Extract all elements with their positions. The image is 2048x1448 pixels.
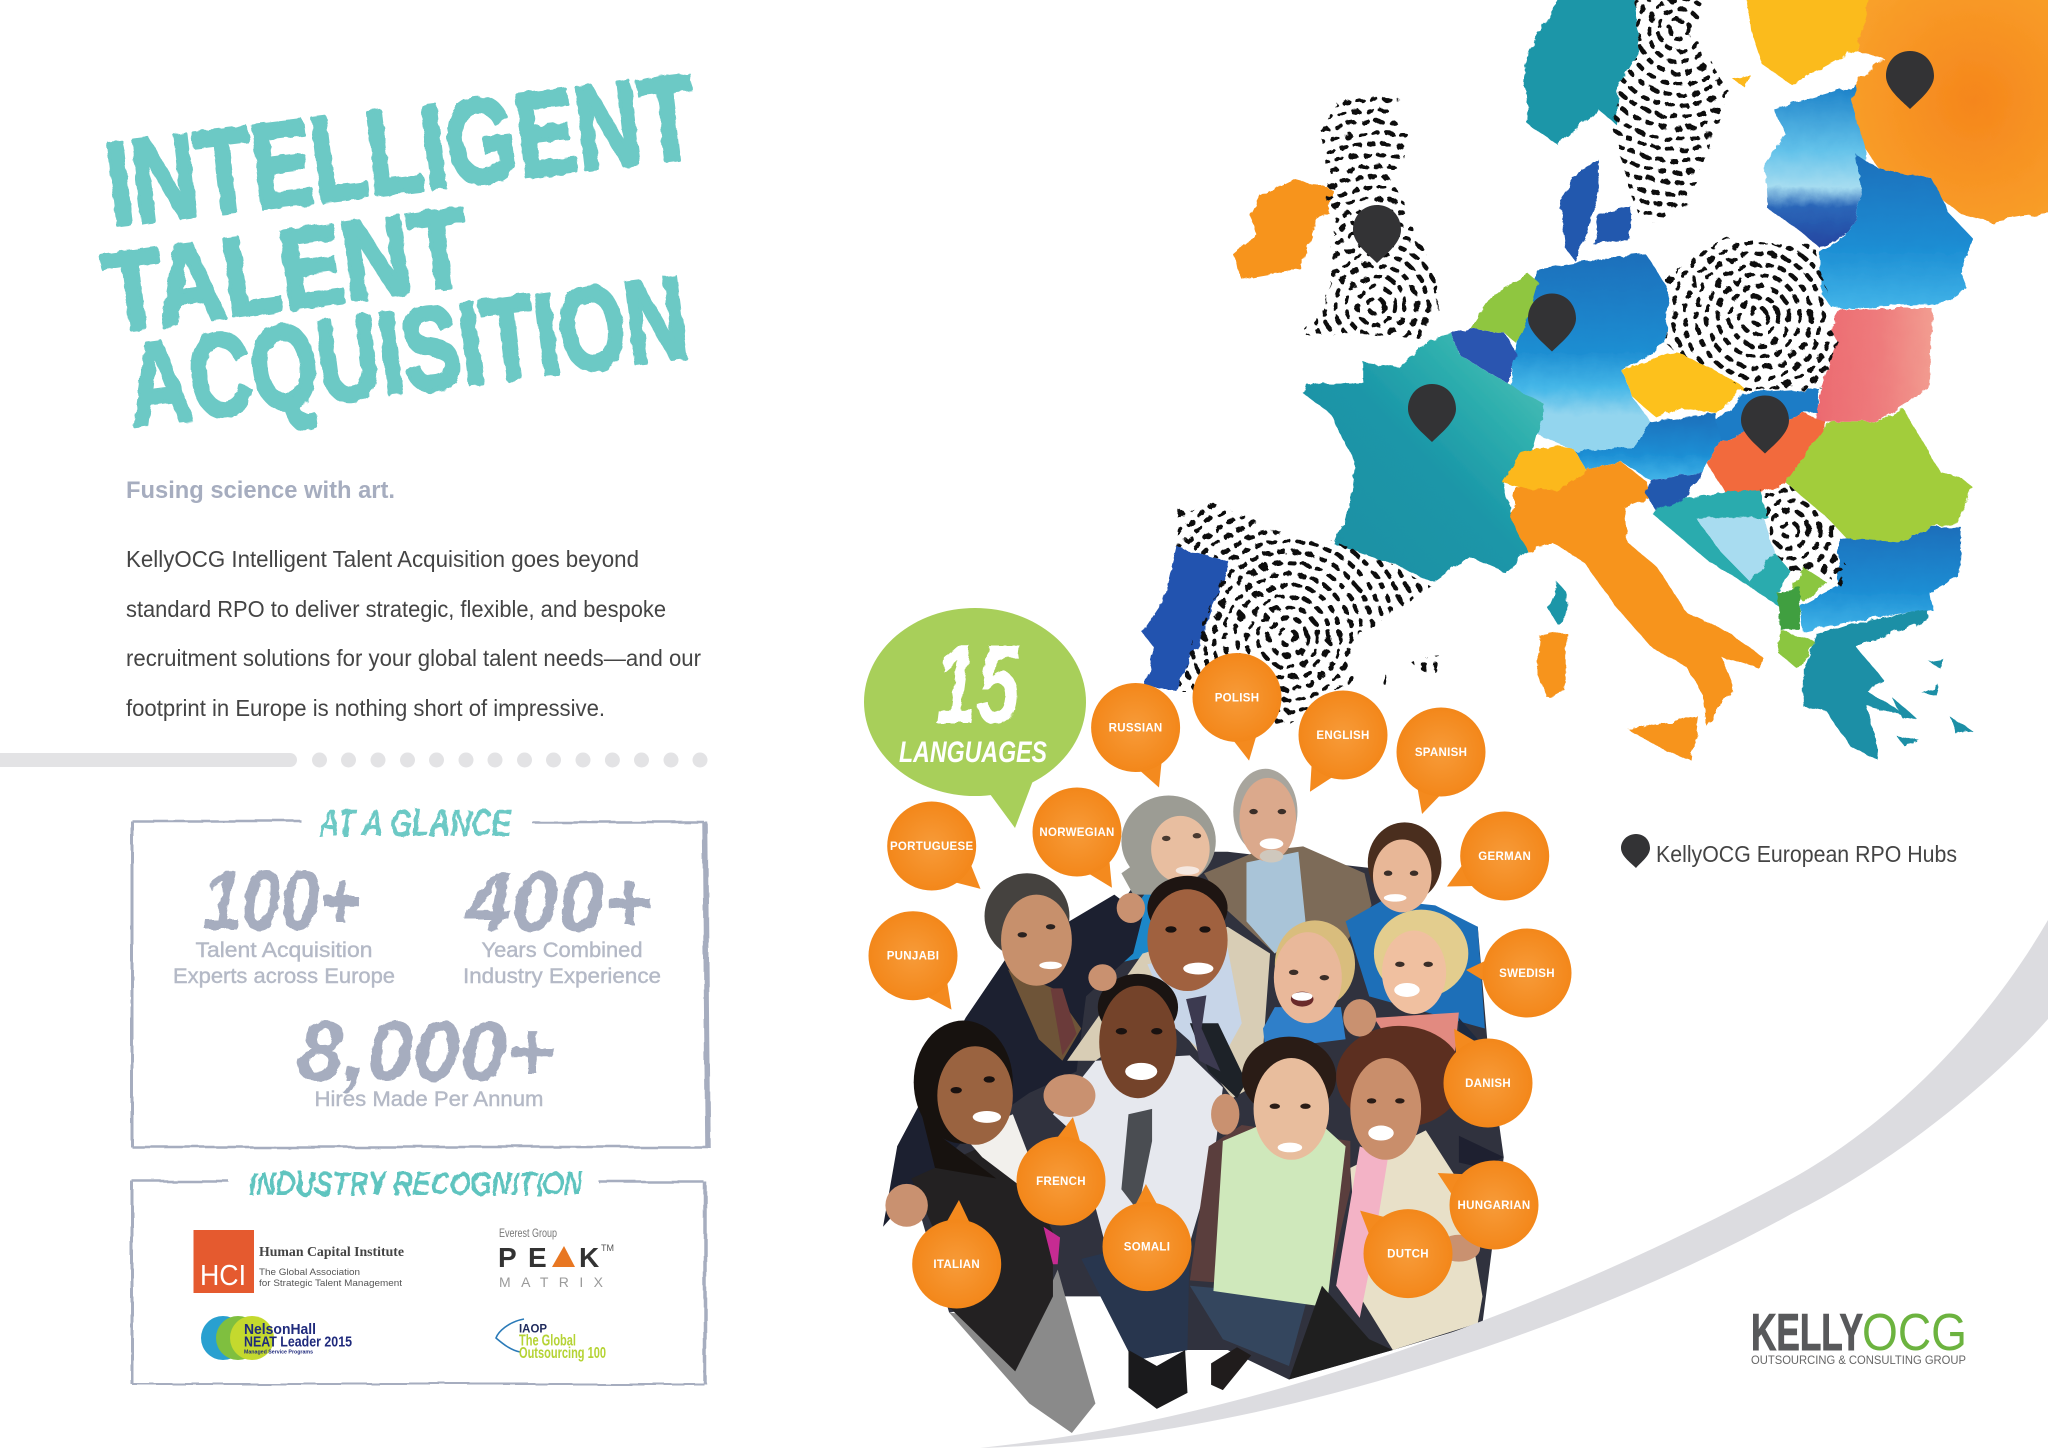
intro paragraph: footprint in Europe is nothing short of impressive.: [126, 695, 605, 721]
person: woman in green blouse: [1190, 1037, 1350, 1390]
bubble: Portuguese: PORTUGUESE: [890, 841, 973, 853]
bubble: Punjabi: PUNJABI: [887, 951, 939, 963]
title: [97, 50, 703, 453]
panel: at a glance: [132, 803, 708, 1148]
logo: Human Capital Institute: for Strategic Talent Management: [259, 1278, 402, 1289]
patterned country: Sweden: [1612, 0, 1729, 223]
hub pins: [1353, 51, 1934, 454]
logo: IAOP Global Outsourcing 100: [496, 1319, 606, 1362]
hands on shoulders: [885, 893, 1480, 1262]
bubble: Hungarian: HUNGARIAN: [1458, 1200, 1530, 1212]
bubble: Somali: SOMALI: [1124, 1242, 1170, 1254]
logo: KellyOCG: KELLY: [1751, 1304, 1863, 1362]
stat: 8,000+ hires: Hires Made Per Annum: [314, 1088, 544, 1111]
person: man with tie, front: [1053, 974, 1223, 1409]
logo: Everest Group PEAK Matrix: Everest Group: [499, 1226, 557, 1240]
patterned country: Spain: [1176, 502, 1439, 724]
patterned country: Poland: [1664, 236, 1840, 392]
bubble: Italian: ITALIAN: [933, 1259, 980, 1271]
patterned country: Serbia: [1760, 486, 1846, 586]
logo: NelsonHall NEAT Leader: Managed Service Programs: [244, 1350, 313, 1356]
title: INTELLIGENT: [99, 50, 703, 252]
logo: Human Capital Institute: [194, 1230, 404, 1293]
logo: Everest Group PEAK Matrix: E: [528, 1242, 547, 1273]
logo: KellyOCG: OCG: [1862, 1304, 1967, 1362]
bubble: Russian: [1091, 683, 1190, 799]
bubble: German: GERMAN: [1478, 851, 1531, 863]
logo: Everest Group PEAK Matrix: TM: [601, 1243, 614, 1253]
bubble: French: FRENCH: [1036, 1176, 1086, 1188]
person: man in beige jacket: [1067, 876, 1270, 1098]
logo: NelsonHall NEAT Leader: [201, 1316, 352, 1360]
bubble: Russian: RUSSIAN: [1109, 722, 1163, 734]
stat: 400+ years: 400+: [464, 855, 652, 949]
logo: NelsonHall NEAT Leader: NEAT Leader 2015: [244, 1334, 352, 1350]
bubble: French: [1016, 1111, 1106, 1226]
bubble: Punjabi: [868, 911, 978, 1029]
person: blonde woman right: [1374, 910, 1478, 1061]
person: curly-haired woman: [1289, 1026, 1504, 1379]
logo: Everest Group PEAK Matrix: [498, 1226, 614, 1290]
bubble: Spanish: SPANISH: [1415, 747, 1467, 759]
intro paragraph: KellyOCG Intelligent Talent Acquisition goes beyond: [126, 546, 639, 572]
person: older man at back: [1204, 769, 1372, 954]
bubble: Italian: [912, 1199, 1001, 1308]
logo: Everest Group PEAK Matrix: MATRIX: [499, 1274, 604, 1290]
bubble: Danish: [1426, 1011, 1532, 1128]
person: man in dark jacket: [883, 873, 1143, 1227]
logo: IAOP Global Outsourcing 100: The Global: [519, 1332, 576, 1350]
callout: 15 languages: LANGUAGES: [899, 736, 1047, 769]
intro paragraph: [126, 546, 701, 721]
stat: 400+ years: [463, 855, 661, 988]
stat: 100+ experts: Talent Acquisition: [196, 939, 372, 962]
bubble: English: ENGLISH: [1316, 730, 1370, 742]
logo: Human Capital Institute: HCI: [200, 1260, 246, 1292]
logo: Human Capital Institute: The Global Association: [259, 1267, 360, 1278]
heading: at a glance: AT A GLANCE: [318, 803, 512, 845]
stat: 400+ years: Years Combined: [482, 939, 642, 962]
bubble: Polish: [1192, 653, 1282, 767]
logo: Everest Group PEAK Matrix: P: [498, 1242, 517, 1273]
stat: 100+ experts: 100+: [203, 853, 360, 947]
bubble: Hungarian: [1421, 1144, 1538, 1250]
stat: 8,000+ hires: 8,000+: [297, 1004, 555, 1098]
bubble: Spanish: [1390, 708, 1486, 824]
person: older woman at back: [1112, 796, 1216, 964]
dotted divider: [0, 752, 708, 768]
subheading: Fusing science with art.: [126, 477, 395, 504]
group silhouette base: [897, 852, 1504, 1379]
group photo of people: [883, 769, 1504, 1433]
bubble: Norwegian: NORWEGIAN: [1039, 827, 1115, 839]
person: young man at back right: [1346, 822, 1485, 1029]
bubble: English: [1281, 690, 1388, 808]
intro paragraph: recruitment solutions for your global talent needs—and our: [126, 645, 701, 671]
bubble: Portuguese: [887, 802, 1002, 914]
stat: 100+ experts: [173, 853, 395, 988]
patterned country: United Kingdom: [1304, 96, 1440, 339]
bubble: Swedish: [1464, 928, 1572, 1018]
callout: 15 languages: 15: [935, 622, 1020, 747]
watercolour and patterned countries: [1115, 0, 2048, 810]
panel: industry recognition: [132, 1165, 705, 1384]
logo: IAOP Global Outsourcing 100: IAOP: [519, 1322, 547, 1336]
intro paragraph: standard RPO to deliver strategic, flexible, and bespoke: [126, 596, 666, 622]
logo: Human Capital Institute: Human Capital Institute: [259, 1244, 404, 1259]
title: ACQUISITION: [120, 251, 695, 453]
bubble: Dutch: DUTCH: [1387, 1249, 1429, 1261]
bubble: Danish: DANISH: [1465, 1078, 1511, 1090]
bubble: Norwegian: [1032, 788, 1140, 905]
heading: industry recognition: INDUSTRY RECOGNITION: [249, 1165, 584, 1202]
legend: European RPO hubs: [1621, 834, 1957, 868]
logo: IAOP Global Outsourcing 100: Outsourcing 100: [519, 1345, 606, 1362]
logo: NelsonHall NEAT Leader: NelsonHall: [244, 1322, 316, 1338]
bubble: Somali: [1102, 1183, 1192, 1291]
person: blonde woman centre: [1263, 920, 1355, 1050]
logo: Everest Group PEAK Matrix: K: [579, 1242, 599, 1273]
bubble: Swedish: SWEDISH: [1499, 968, 1555, 980]
logo: KellyOCG: OUTSOURCING & CONSULTING GROUP: [1751, 1355, 1966, 1367]
bubble: Dutch: [1338, 1186, 1452, 1298]
bubble: Polish: POLISH: [1215, 692, 1259, 704]
grey swoosh: [980, 920, 2048, 1448]
person: woman on left: [911, 1021, 1095, 1433]
bubble: German: [1432, 812, 1549, 916]
title: TALENT: [97, 183, 476, 357]
callout: 15 languages: [864, 608, 1086, 828]
stat: 100+ experts: Experts across Europe: [173, 965, 395, 988]
map of Europe: [1115, 0, 2048, 810]
legend: European RPO hubs: KellyOCG European RPO Hubs: [1656, 841, 1957, 867]
language bubbles: [868, 653, 1572, 1308]
stat: 400+ years: Industry Experience: [463, 965, 661, 988]
